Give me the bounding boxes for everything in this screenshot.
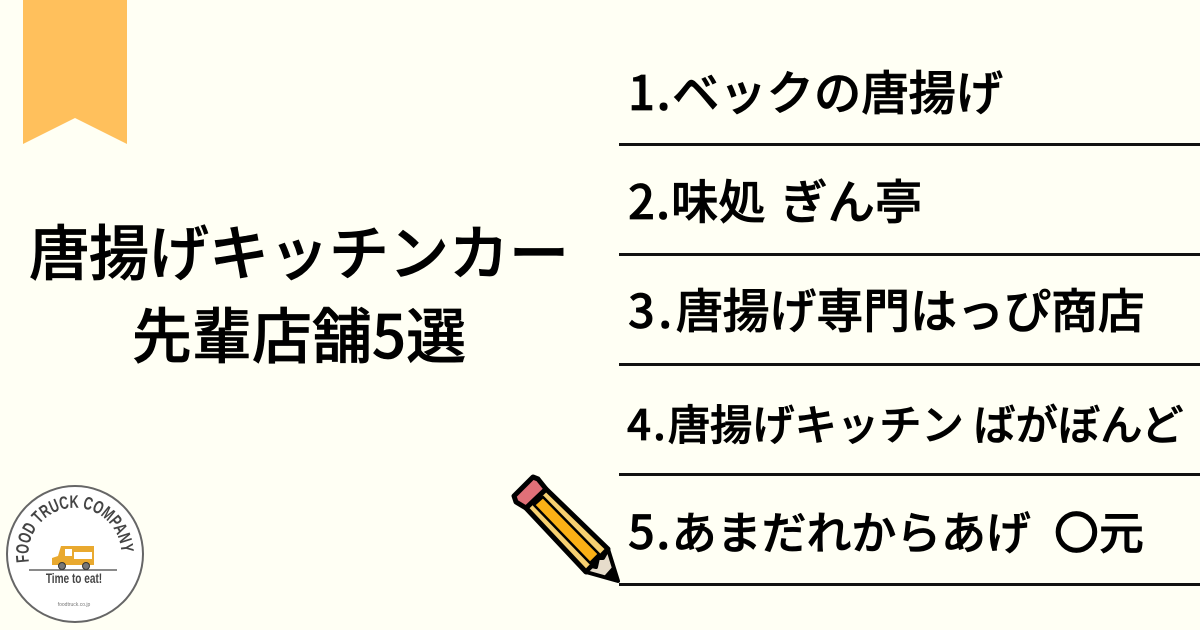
title: 唐揚げキッチンカー: [29, 206, 569, 293]
logo: Food Truck Company: foodtruck.co.jp: [58, 602, 90, 608]
list item 1: 1.ベックの唐揚げ: [628, 55, 1003, 124]
divider 1: [619, 143, 1200, 146]
list item 4: 4.唐揚げキッチン ばがぼんど: [627, 392, 1184, 453]
ribbon bookmark: [23, 0, 127, 144]
logo: Food Truck Company: [6, 485, 144, 623]
list item 2: 2.味処 ぎん亭: [628, 164, 922, 233]
title: 先輩店舗5選: [132, 289, 466, 376]
divider 2: [619, 253, 1200, 256]
divider 4: [619, 473, 1200, 476]
title: [29, 206, 569, 376]
divider 3: [619, 363, 1200, 366]
divider 5: [619, 583, 1200, 586]
truck: [52, 546, 94, 570]
logo text: FOOD TRUCK COMPANY: [16, 495, 134, 562]
list item 3: 3.唐揚げ専門はっぴ商店: [628, 274, 1145, 342]
logo: Food Truck Company: Time to eat!: [46, 570, 102, 586]
list item 5: 5.あまだれからあげ 〇元: [628, 494, 1144, 563]
